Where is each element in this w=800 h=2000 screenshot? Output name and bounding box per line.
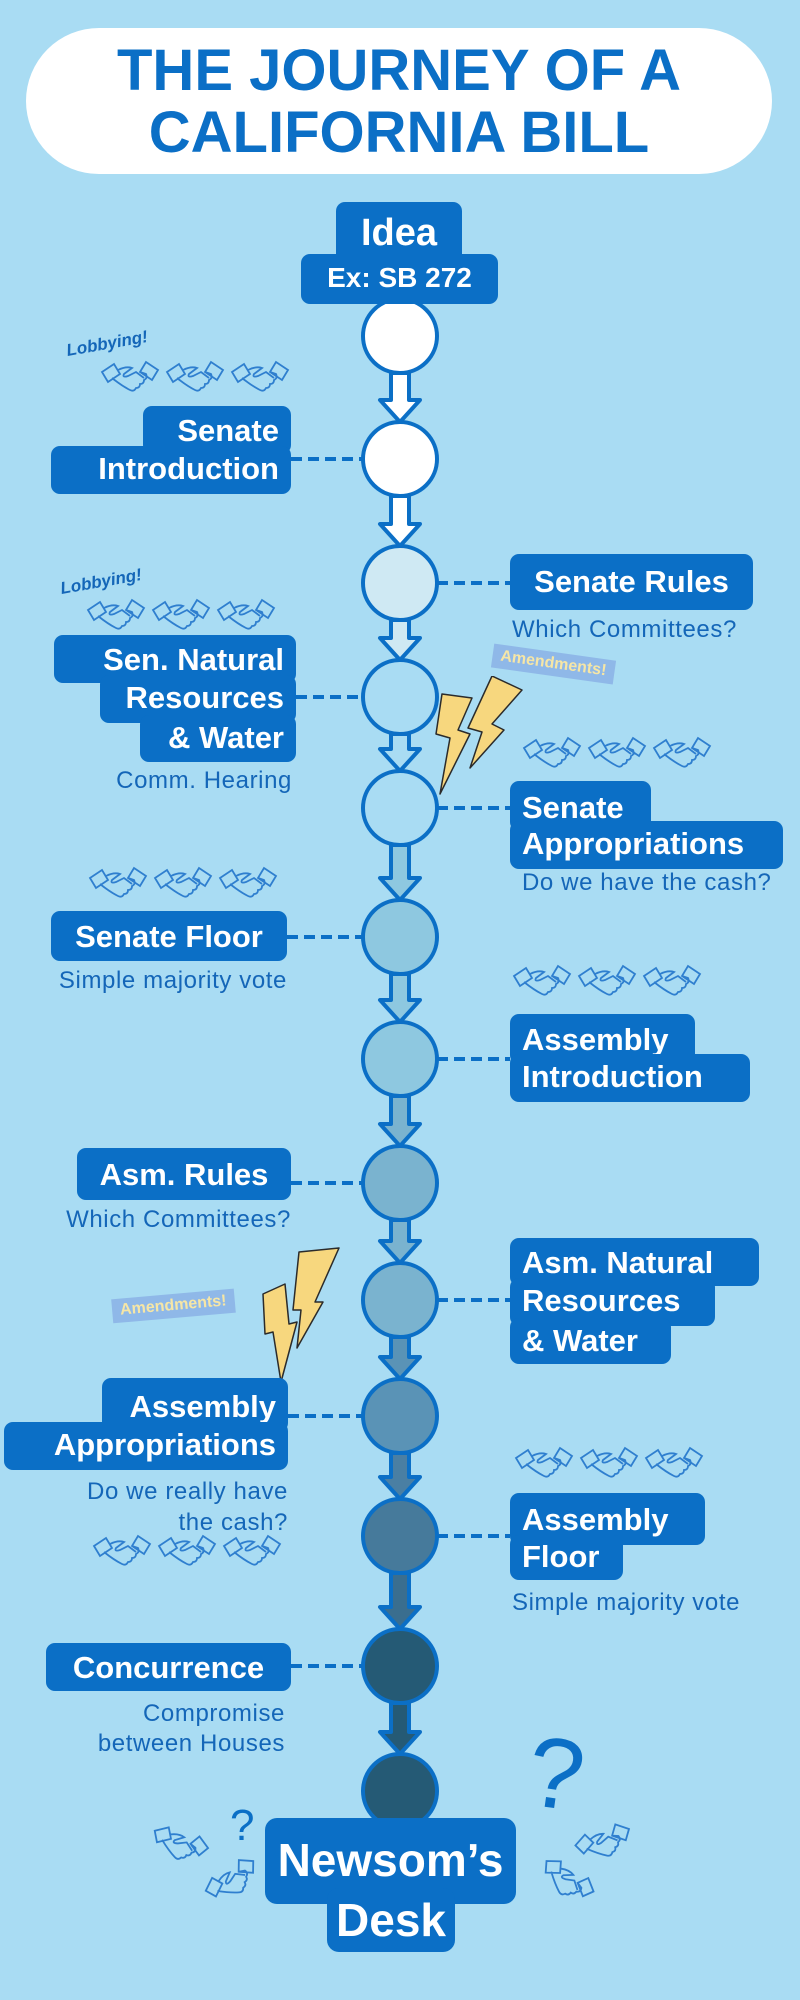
- label: Concurrence: [46, 1643, 291, 1757]
- label: Sen. Natural Resources & Water: Sen. Natural: [103, 642, 284, 677]
- amendments badge 2: [111, 1289, 235, 1323]
- label: Asm. Natural Resources & Water: Resources: [522, 1283, 681, 1318]
- label: Assembly Appropriations: Do we really have: [87, 1478, 288, 1505]
- label: Senate Rules: Which Committees?: [512, 616, 737, 643]
- label: Senate Appropriations: [510, 781, 783, 896]
- label: Senate Introduction: Introduction: [98, 451, 279, 486]
- label: Idea: Ex: SB 272: [327, 262, 472, 293]
- label: Assembly Floor: Floor: [522, 1539, 600, 1574]
- label: Concurrence: between Houses: [98, 1730, 285, 1757]
- handshakes row 4: [88, 866, 278, 898]
- lobbying note 1: Lobbying!: [65, 327, 149, 360]
- handshakes around desk (left): [154, 1826, 254, 1898]
- label: Senate Appropriations: Do we have the cash?: [522, 869, 771, 896]
- handshakes row 2: [86, 598, 276, 630]
- label: Assembly Appropriations: the cash?: [179, 1509, 288, 1536]
- label: Newsom's Desk: [265, 1818, 516, 1952]
- label: Senate Appropriations: Appropriations: [522, 826, 744, 861]
- handshakes row 1: [100, 360, 290, 392]
- label: Sen. Natural Resources & Water: Resources: [125, 680, 284, 715]
- label: Sen. Natural Resources & Water: [54, 635, 296, 794]
- label: Senate Floor: Senate Floor: [75, 919, 263, 954]
- label: Asm. Natural Resources & Water: [510, 1238, 759, 1364]
- label: Asm. Rules: [66, 1148, 291, 1233]
- amendments badge 1: [491, 644, 616, 684]
- amendments badge 2: Amendments!: [119, 1292, 227, 1319]
- label: Senate Floor: Simple majority vote: [59, 967, 287, 994]
- amendments badge 1: Amendments!: [499, 648, 607, 679]
- title: CALIFORNIA BILL: [149, 100, 649, 165]
- handshakes row 5: [512, 964, 702, 996]
- label: Idea: [301, 202, 498, 304]
- label: Assembly Floor: [510, 1493, 740, 1616]
- label: Sen. Natural Resources & Water: Comm. Hearing: [116, 767, 292, 794]
- icon: lightning bolts 1: [435, 676, 523, 795]
- label: Senate Appropriations: Senate: [522, 790, 624, 825]
- label: Senate Rules: Senate Rules: [534, 564, 729, 599]
- label: Senate Introduction: [51, 406, 291, 494]
- label: Concurrence: Compromise: [143, 1700, 285, 1727]
- label: Concurrence: Concurrence: [73, 1650, 264, 1685]
- label: Assembly Appropriations: Assembly: [130, 1389, 276, 1424]
- label: Asm. Natural Resources & Water: Asm. Natural: [522, 1245, 713, 1280]
- icon: big question mark: ?: [520, 1715, 591, 1833]
- icon: lightning bolts 2: [262, 1247, 340, 1379]
- title: THE JOURNEY OF A: [117, 38, 681, 103]
- label: Senate Floor: [51, 911, 287, 994]
- handshakes around desk (right): [544, 1823, 630, 1898]
- label: Idea: Idea: [361, 212, 437, 254]
- label: Newsom's Desk: Newsom’s: [278, 1834, 503, 1886]
- handshakes row 6 (left): [92, 1534, 282, 1566]
- label: Sen. Natural Resources & Water: & Water: [168, 720, 284, 755]
- label: Assembly Introduction: Assembly: [522, 1022, 668, 1057]
- label: Assembly Introduction: Introduction: [522, 1059, 703, 1094]
- label: Asm. Natural Resources & Water: & Water: [522, 1323, 638, 1358]
- label: Asm. Rules: Asm. Rules: [100, 1157, 268, 1192]
- label: Asm. Rules: Which Committees?: [66, 1206, 291, 1233]
- label: Senate Introduction: Senate: [177, 413, 279, 448]
- label: Newsom's Desk: Desk: [336, 1894, 446, 1946]
- label: Assembly Floor: Assembly: [522, 1502, 668, 1537]
- label: Assembly Introduction: [510, 1014, 750, 1102]
- icon: small question mark: ?: [230, 1801, 254, 1850]
- label: Assembly Appropriations: [4, 1378, 288, 1536]
- title: [26, 28, 772, 174]
- handshakes row 3: [522, 736, 712, 768]
- label: Assembly Appropriations: Appropriations: [54, 1427, 276, 1462]
- handshakes row 7 (right): [514, 1446, 704, 1478]
- label: Senate Rules: [510, 554, 753, 643]
- label: Assembly Floor: Simple majority vote: [512, 1589, 740, 1616]
- lobbying note 2: Lobbying!: [59, 565, 143, 598]
